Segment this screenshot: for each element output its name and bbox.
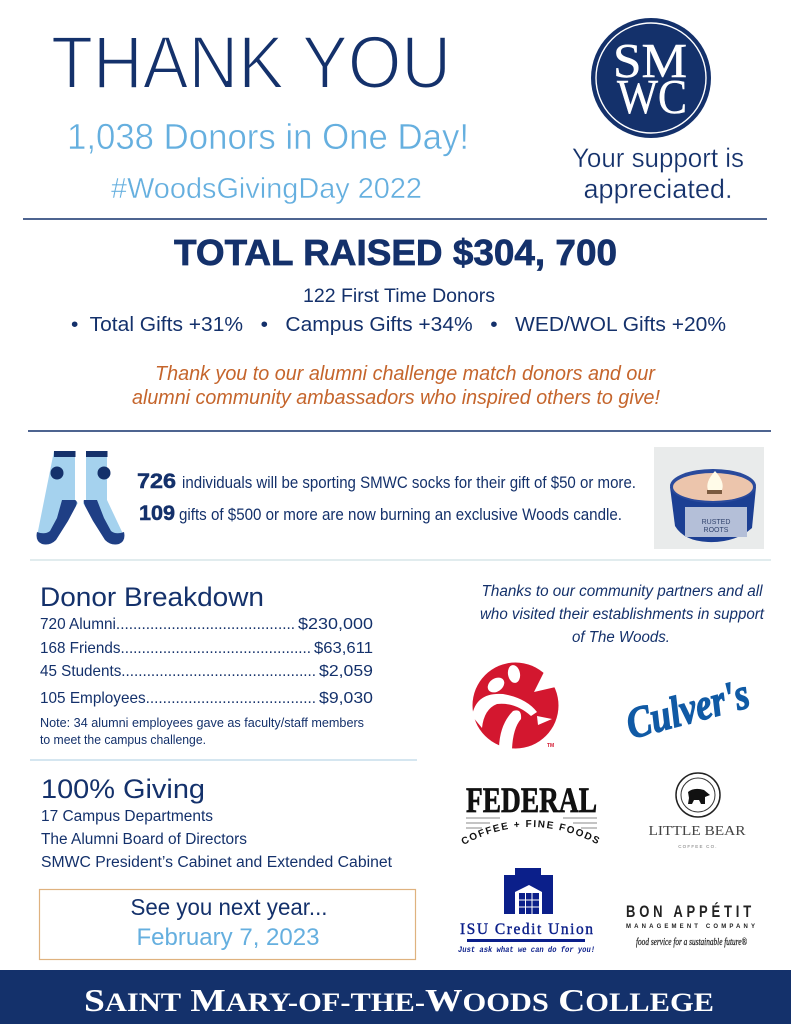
logo: Federal Coffee + Fine Foods: FEDERAL [466, 780, 597, 820]
icon: socks [37, 451, 124, 544]
gift increases: • Total Gifts +31% • Campus Gifts +34% • WED/WOL Gifts +20% [71, 313, 726, 336]
logo: Bon Appetit: MANAGEMENT COMPANY [626, 924, 755, 930]
thank-you message: Thank you to our alumni challenge match donors and our [155, 362, 656, 385]
breakdown list: $230,000 [298, 616, 373, 633]
logo: Federal Coffee + Fine Foods: COFFEE + FINE FOODS [462, 820, 600, 844]
callout: see you next year: See you next year... [130, 894, 328, 920]
note: to meet the campus challenge. [40, 733, 206, 747]
giving list: SMWC President’s Cabinet and Extended Cabinet [41, 854, 393, 871]
community partners thanks [480, 583, 765, 646]
heading: donor breakdown: Donor Breakdown [40, 582, 264, 612]
title: THANK YOU [51, 21, 451, 104]
photo: candle: ROOTS [704, 527, 729, 534]
giving list: The Alumni Board of Directors [41, 831, 247, 848]
logo: Federal Coffee + Fine Foods [462, 780, 600, 844]
community partners thanks: who visited their establishments in support [480, 606, 765, 623]
support message: appreciated. [584, 174, 732, 204]
logo: SMWC seal [591, 18, 711, 138]
heading: 100% giving: 100% Giving [41, 774, 205, 804]
logo: Chick-fil-A [472, 660, 562, 749]
logo: ISU Credit Union: ISU Credit Union [460, 921, 593, 938]
callout: see you next year [40, 890, 416, 960]
breakdown list: 105 Employees........................................ [40, 690, 316, 707]
community partners thanks: of The Woods. [572, 629, 670, 646]
breakdown list: 720 Alumni.......................................... [40, 616, 295, 633]
support message: Your support is [572, 143, 744, 173]
thank-you message [132, 362, 660, 409]
breakdown list [40, 616, 373, 707]
donor breakdown panel [40, 582, 373, 747]
candle statement [139, 502, 622, 525]
logo: Chick-fil-A: TM [547, 743, 554, 749]
logo: SMWC seal: SM [613, 33, 687, 88]
photo: candle [654, 447, 764, 549]
thank-you message: alumni community ambassadors who inspired others to give! [132, 386, 660, 409]
logo: Little Bear Coffee Co. [648, 773, 746, 849]
logo: Bon Appetit: BON APPÉTIT [626, 902, 755, 921]
footer band [0, 970, 791, 1024]
candle statement: gifts of $500 or more are now burning an exclusive Woods candle. [179, 506, 622, 524]
logo: ISU Credit Union: Just ask what we can do for you! [458, 946, 595, 955]
socks statement: 726 [137, 470, 176, 493]
breakdown list: 168 Friends............................................. [40, 640, 311, 657]
breakdown list: $63,611 [314, 640, 373, 657]
photo: candle: RUSTED [702, 519, 730, 526]
logo: Little Bear Coffee Co.: COFFEE CO. [678, 844, 718, 849]
logo: SMWC seal: WC [617, 69, 687, 124]
logo: Bon Appetit [626, 902, 755, 948]
donor count subtitle: 1,038 Donors in One Day! [67, 116, 469, 157]
support message [572, 143, 744, 204]
socks statement: individuals will be sporting SMWC socks for their gift of $50 or more. [182, 474, 636, 492]
community partners thanks: Thanks to our community partners and all [482, 583, 763, 600]
breakdown list: $2,059 [319, 663, 373, 680]
total raised heading: TOTAL RAISED $304, 700 [174, 232, 617, 273]
first time donors: 122 First Time Donors [303, 286, 495, 307]
logo: Culver's: Culver's [621, 669, 754, 749]
breakdown list: $9,030 [319, 690, 373, 707]
callout: see you next year: February 7, 2023 [136, 924, 320, 951]
breakdown list: 45 Students.............................................. [40, 663, 316, 680]
giving list: 17 Campus Departments [41, 808, 213, 825]
footer band: SAINT M ARY-OF-THE- WOODS COLLEGE [84, 982, 714, 1018]
socks statement [137, 470, 636, 493]
logo: Little Bear Coffee Co.: LITTLE BEAR [648, 824, 746, 839]
note: Note: 34 alumni employees gave as faculty/staff members [40, 716, 364, 730]
candle statement: 109 [139, 502, 175, 525]
100% giving panel [41, 774, 393, 871]
giving list [41, 808, 393, 871]
hashtag: #WoodsGivingDay 2022 [111, 173, 422, 205]
note [40, 716, 364, 747]
logo: ISU Credit Union [458, 868, 595, 955]
